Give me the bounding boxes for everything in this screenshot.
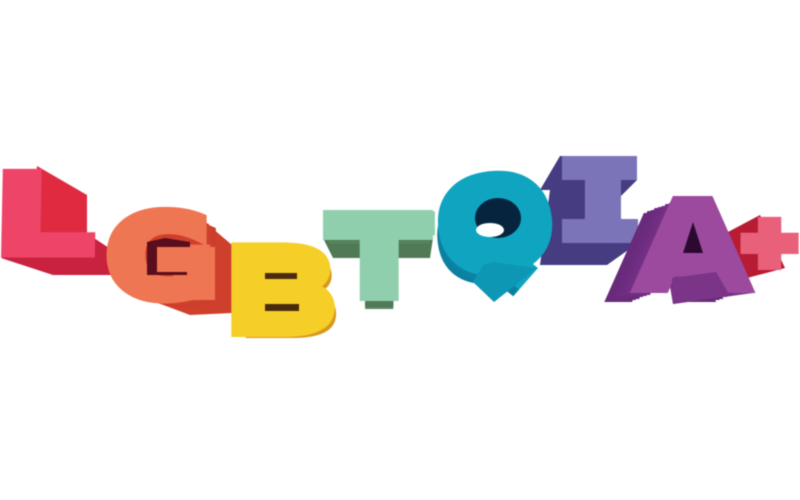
text: G <box>107 193 213 323</box>
text: I <box>571 139 635 263</box>
icon: A notch overlay <box>672 272 729 304</box>
icon: B counter fill <box>272 266 294 313</box>
icon: I top bar <box>562 156 638 180</box>
text: L <box>0 152 93 275</box>
icon: G counter shadow <box>146 238 191 276</box>
icon: G inner bar <box>156 246 216 300</box>
icon: B upper hole <box>264 272 298 280</box>
icon: plus depth <box>728 214 786 278</box>
text: Q <box>429 147 562 305</box>
icon: Q counter shadow <box>474 197 522 239</box>
icon: L lower depth <box>0 238 111 276</box>
icon: Q counter fill <box>476 200 514 250</box>
icon: T bar front <box>322 209 434 240</box>
icon: L upper depth <box>36 166 88 234</box>
icon: B lower hole <box>264 303 300 312</box>
icon: Q tail <box>473 262 536 302</box>
icon: I depth <box>539 155 638 266</box>
icon: G depth behind letter <box>158 230 232 316</box>
icon: A notch fill <box>670 285 752 304</box>
text: B <box>224 225 339 360</box>
icon: I bottom bar <box>562 218 638 244</box>
text: A <box>636 176 749 318</box>
icon: Q tail trim <box>512 268 560 299</box>
text: + <box>741 205 798 278</box>
icon: A counter <box>682 222 704 254</box>
icon: Q counter see-through <box>475 222 505 238</box>
text: T <box>328 194 430 324</box>
icon: T bar underside <box>324 239 434 259</box>
